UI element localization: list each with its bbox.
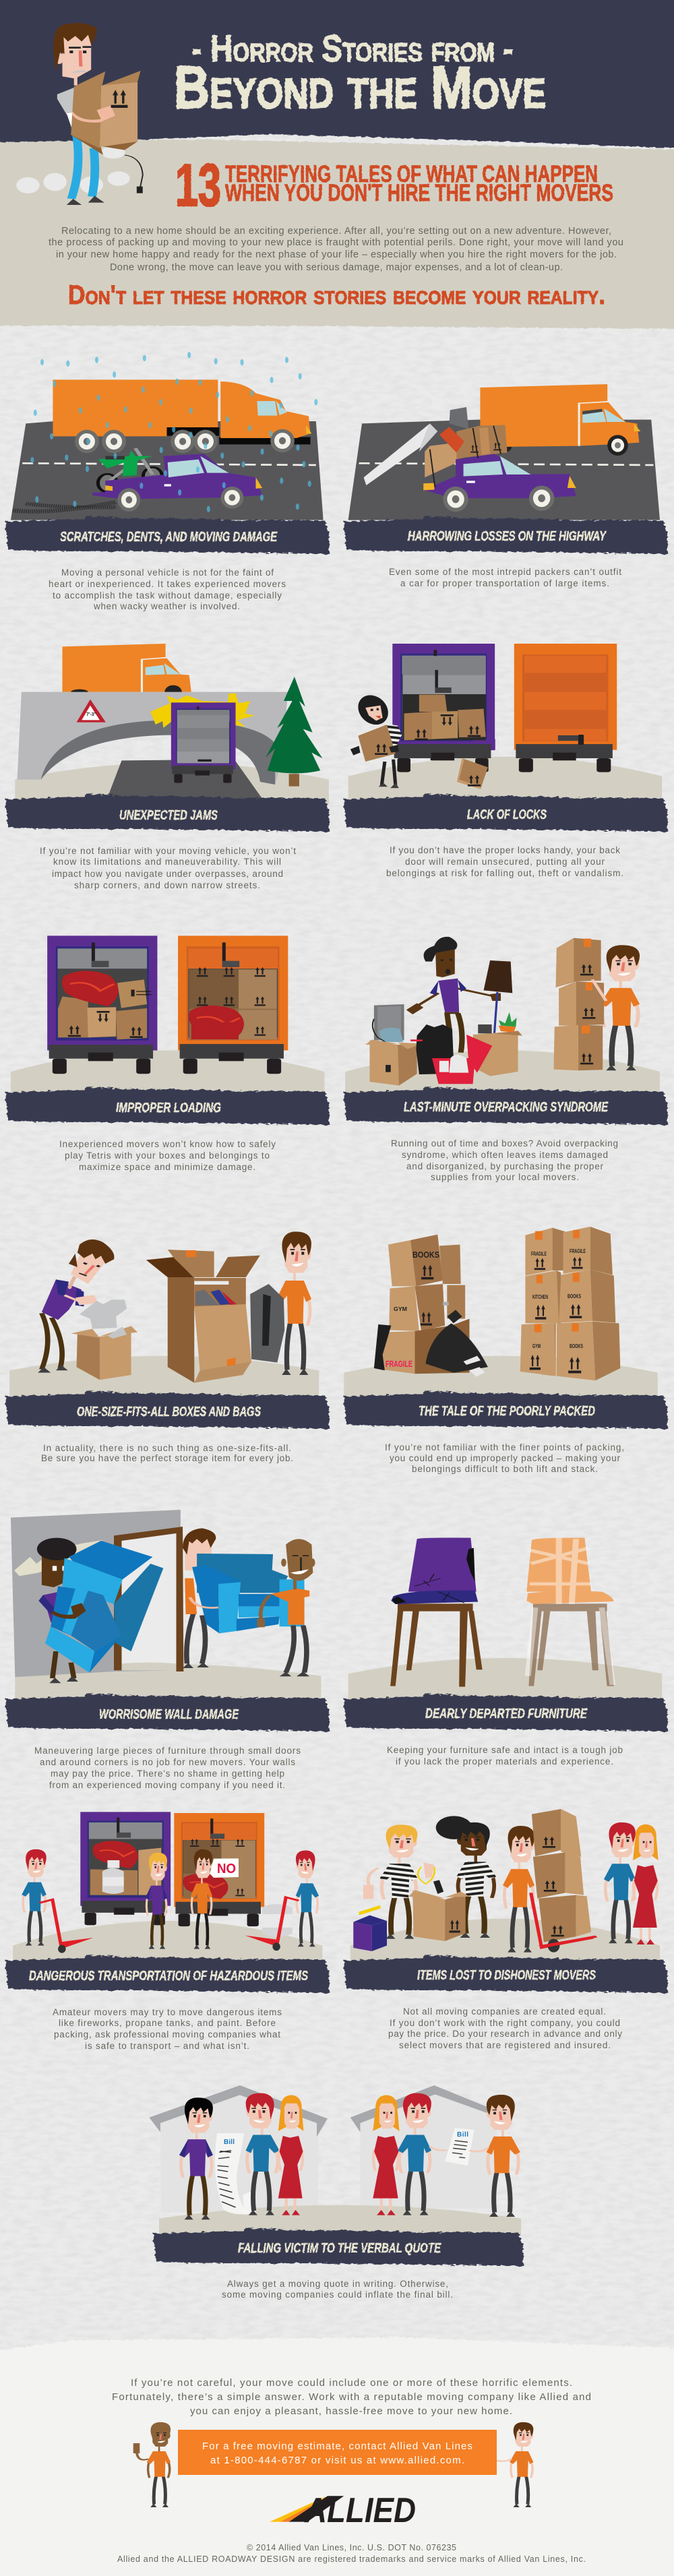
description (391, 1138, 618, 1182)
closing paragraph (112, 2377, 591, 2417)
description: if you lack the proper materials and experience. (396, 1756, 613, 1767)
box labels: KITCHEN (532, 1294, 548, 1300)
heading: IMPROPER LOADING (116, 1101, 221, 1115)
description: like fireworks, propane tanks, and paint. Before (59, 2018, 276, 2028)
heading: DEARLY DEPARTED FURNITURE (425, 1707, 587, 1721)
closing paragraph: Fortunately, there’s a simple answer. Work with a reputable moving company like Allied and (112, 2391, 591, 2403)
panel: lack of locks (344, 644, 668, 878)
description: maximize space and minimize damage. (79, 1162, 255, 1172)
sign: no: NO (217, 1862, 236, 1876)
description: Not all moving companies are created equal. (403, 2006, 606, 2017)
heading: LACK OF LOCKS (467, 807, 547, 822)
beige intro panel (0, 140, 674, 329)
description: play Tetris with your boxes and belongings to (65, 1151, 270, 1161)
banner (344, 1955, 668, 1993)
description (41, 1443, 293, 1463)
banner (5, 516, 330, 554)
banner (5, 1391, 330, 1429)
heading: THE TALE OF THE POORLY PACKED (419, 1404, 595, 1419)
description: Amateur movers may try to move dangerous items (53, 2007, 282, 2017)
description: Running out of time and boxes? Avoid overpacking (391, 1138, 618, 1148)
description: may pay the price. There’s no shame in getting help (51, 1769, 284, 1779)
heading: ONE-SIZE-FITS-ALL BOXES AND BAGS (77, 1405, 261, 1419)
description: Moving a personal vehicle is not for the faint of (61, 568, 274, 578)
description: and around corners is no job for new movers. Your walls (40, 1757, 295, 1767)
description: In actuality, there is no such thing as one-size-fits-all. (43, 1443, 291, 1453)
panel: falling victim to the verbal quote (149, 2085, 524, 2300)
description: heart or inexperienced. It takes experienced movers (49, 579, 286, 589)
panel: one-size-fits-all boxes and bags (5, 1231, 330, 1463)
description: when wacky weather is involved. (93, 601, 240, 611)
panel: worrisome wall damage (5, 1510, 330, 1790)
description: Be sure you have the perfect storage item for every job. (41, 1453, 293, 1463)
description: If you’re not familiar with your moving vehicle, you won’t (40, 846, 296, 856)
description (49, 568, 286, 611)
panel: dearly departed furniture (344, 1538, 668, 1767)
heading: WORRISOME WALL DAMAGE (99, 1707, 239, 1722)
illustration: truck, car, motorcycle in rain (11, 352, 324, 520)
description: syndrome, which often leaves items damaged (402, 1150, 608, 1160)
panel: harrowing losses on the highway (344, 384, 668, 588)
closing paragraph: you can enjoy a pleasant, hassle-free move to your new home. (190, 2405, 512, 2417)
description: some moving companies could inflate the final bill. (222, 2290, 453, 2300)
description: impact how you navigate under overpasses, around (52, 869, 283, 879)
bill labels: Bill (224, 2139, 235, 2146)
description (40, 846, 296, 890)
illustration: overloaded car and truck (348, 384, 660, 520)
box labels (386, 1248, 586, 1369)
heading: LAST-MINUTE OVERPACKING SYNDROME (404, 1100, 608, 1115)
description: know its limitations and maneuverability. This will (53, 857, 281, 867)
banner (344, 516, 668, 554)
warning heading: Don't let these horror stories become your reality. (68, 280, 605, 310)
number 13: 13 (175, 152, 221, 218)
banner (344, 1087, 668, 1125)
movers holding the call to action (133, 2422, 533, 2507)
description: If you don’t work with the right company, you could (390, 2018, 620, 2028)
logo: Allied: ALLIED (303, 2491, 416, 2530)
legal text (117, 2543, 586, 2564)
description (34, 1746, 301, 1790)
illustration: thieves looting a box, mover and couple (350, 1809, 660, 1963)
bill labels (224, 2131, 468, 2146)
title: horror stories from: - Horror Stories from - (191, 27, 514, 69)
heading: UNEXPECTED JAMS (119, 808, 218, 823)
description (385, 1442, 624, 1474)
description (387, 1745, 623, 1767)
box labels: GYM (394, 1306, 407, 1312)
illustration: scattered belongings and neat stack (345, 937, 660, 1094)
description (389, 567, 621, 588)
box labels: BOOKS (412, 1250, 439, 1260)
description: sharp corners, and down narrow streets. (74, 880, 260, 890)
description: Even some of the most intrepid packers can’t outfit (389, 567, 621, 577)
panel: the tale of the poorly packed (344, 1227, 668, 1474)
box labels: GYM (532, 1343, 541, 1349)
banner (344, 1694, 668, 1731)
description (388, 2006, 622, 2050)
description (386, 845, 623, 878)
illustration: badly and well loaded trucks (11, 936, 325, 1094)
call to action box: For a free moving estimate, contact Allied Van Lines (202, 2441, 472, 2452)
heading: ITEMS LOST TO DISHONEST MOVERS (417, 1968, 596, 1983)
description: and disorganized, by purchasing the proper (406, 1161, 604, 1171)
illustration: thief and unlocked truck (348, 644, 662, 804)
description: pay the price. Do your research in advance and only (388, 2029, 622, 2039)
footer panel (0, 2337, 674, 2576)
illustration: trucks, propane tanks and movers (13, 1812, 322, 1963)
box labels: FRAGILE (570, 1248, 586, 1254)
box labels: FRAGILE (531, 1251, 547, 1257)
box labels: BOOKS (570, 1343, 583, 1349)
illustration: couples receiving inflated bills (149, 2085, 521, 2234)
banner (5, 1955, 330, 1993)
dark top panel (0, 0, 674, 148)
box labels: FRAGILE (386, 1359, 412, 1369)
intro paragraph: in your new home happy and ready for the next phase of your life – especially when you hire the right movers for the job. (56, 249, 617, 260)
description: belongings difficult to both lift and stack. (412, 1464, 598, 1474)
logo: Allied (270, 2491, 416, 2530)
description: Inexperienced movers won’t know how to safely (59, 1139, 276, 1149)
description: If you’re not familiar with the finer points of packing, (385, 1442, 624, 1452)
closing paragraph: If you’re not careful, your move could include one or more of these horrific elements. (131, 2377, 572, 2389)
header panel (0, 0, 674, 329)
text: clearance sign: 7'-3" (86, 712, 96, 717)
illustration: messy and tidy box stacks (344, 1227, 658, 1397)
icon: man carrying box dropping plates and plug (16, 23, 143, 205)
title: beyond the move: Beyond the Move (174, 54, 546, 121)
illustration: truck stuck under overpass (15, 644, 329, 804)
description: you could end up improperly packed – making your (390, 1453, 620, 1463)
illustration: wardrobe box and small box (9, 1231, 319, 1397)
description: Keeping your furniture safe and intact is a tough job (387, 1745, 623, 1755)
banner (5, 794, 330, 832)
panel: improper loading (5, 936, 330, 1172)
heading: HARROWING LOSSES ON THE HIGHWAY (408, 529, 607, 544)
banner (5, 1694, 330, 1731)
intro paragraph: the process of packing up and moving to your new place is fraught with potential perils. Done right, your move will land you (49, 237, 623, 248)
description (53, 2007, 282, 2051)
description: belongings at risk for falling out, theft or vandalism. (386, 868, 623, 878)
panel: unexpected jams (5, 644, 330, 890)
heading: FALLING VICTIM TO THE VERBAL QUOTE (238, 2241, 441, 2256)
description: If you don’t have the proper locks handy, your back (390, 845, 620, 855)
legal text: Allied and the ALLIED ROADWAY DESIGN are registered trademarks and service marks of Allied Van Lines, Inc. (117, 2554, 586, 2564)
illustration: damaged purple chair and faded orange chair (348, 1538, 662, 1700)
description: a car for proper transportation of large items. (400, 578, 609, 588)
light torn footer background (0, 2337, 674, 2576)
call to action box (178, 2430, 497, 2475)
description (59, 1139, 276, 1172)
description: to accomplish the task without damage, especially (53, 590, 282, 601)
call to action box: at 1-800-444-6787 or visit us at www.allied.com. (210, 2455, 464, 2466)
description: Always get a moving quote in writing. Otherwise, (227, 2279, 448, 2289)
description: supplies from your local movers. (431, 1172, 579, 1182)
heading: DANGEROUS TRANSPORTATION OF HAZARDOUS ITEMS (29, 1969, 308, 1984)
panel: last-minute overpacking syndrome (344, 937, 668, 1182)
description: select movers that are registered and insured. (399, 2040, 611, 2050)
banner (153, 2228, 524, 2266)
panel: dangerous transportation of hazardous items (5, 1812, 330, 2051)
panel: items lost to dishonest movers (344, 1809, 668, 2050)
legal text: © 2014 Allied Van Lines, Inc. U.S. DOT No. 076235 (247, 2543, 456, 2552)
description: Maneuvering large pieces of furniture through small doors (34, 1746, 301, 1756)
description: door will remain unsecured, putting all your (405, 857, 605, 867)
description: packing, ask professional moving companies what (54, 2029, 280, 2040)
description: from an experienced moving company if you need it. (49, 1780, 285, 1790)
illustration: movers carrying blue sofas through a door (11, 1510, 321, 1700)
banner (344, 794, 668, 832)
intro paragraph (49, 226, 623, 273)
box labels: BOOKS (568, 1293, 581, 1299)
description: is safe to transport – and what isn’t. (85, 2041, 249, 2051)
panel: scratches, dents and moving damage (5, 352, 330, 611)
banner (5, 1087, 330, 1125)
heading: SCRATCHES, DENTS, AND MOVING DAMAGE (60, 530, 277, 545)
intro paragraph: Done wrong, the move can leave you with serious damage, major expenses, and a lot of clean-up. (110, 262, 563, 273)
bill labels: Bill (457, 2131, 468, 2139)
banner (344, 1391, 668, 1429)
description (222, 2279, 453, 2300)
subtitle (225, 161, 613, 206)
intro paragraph: Relocating to a new home should be an exciting experience. After all, you’re setting out on a new adventure. However, (61, 226, 611, 237)
